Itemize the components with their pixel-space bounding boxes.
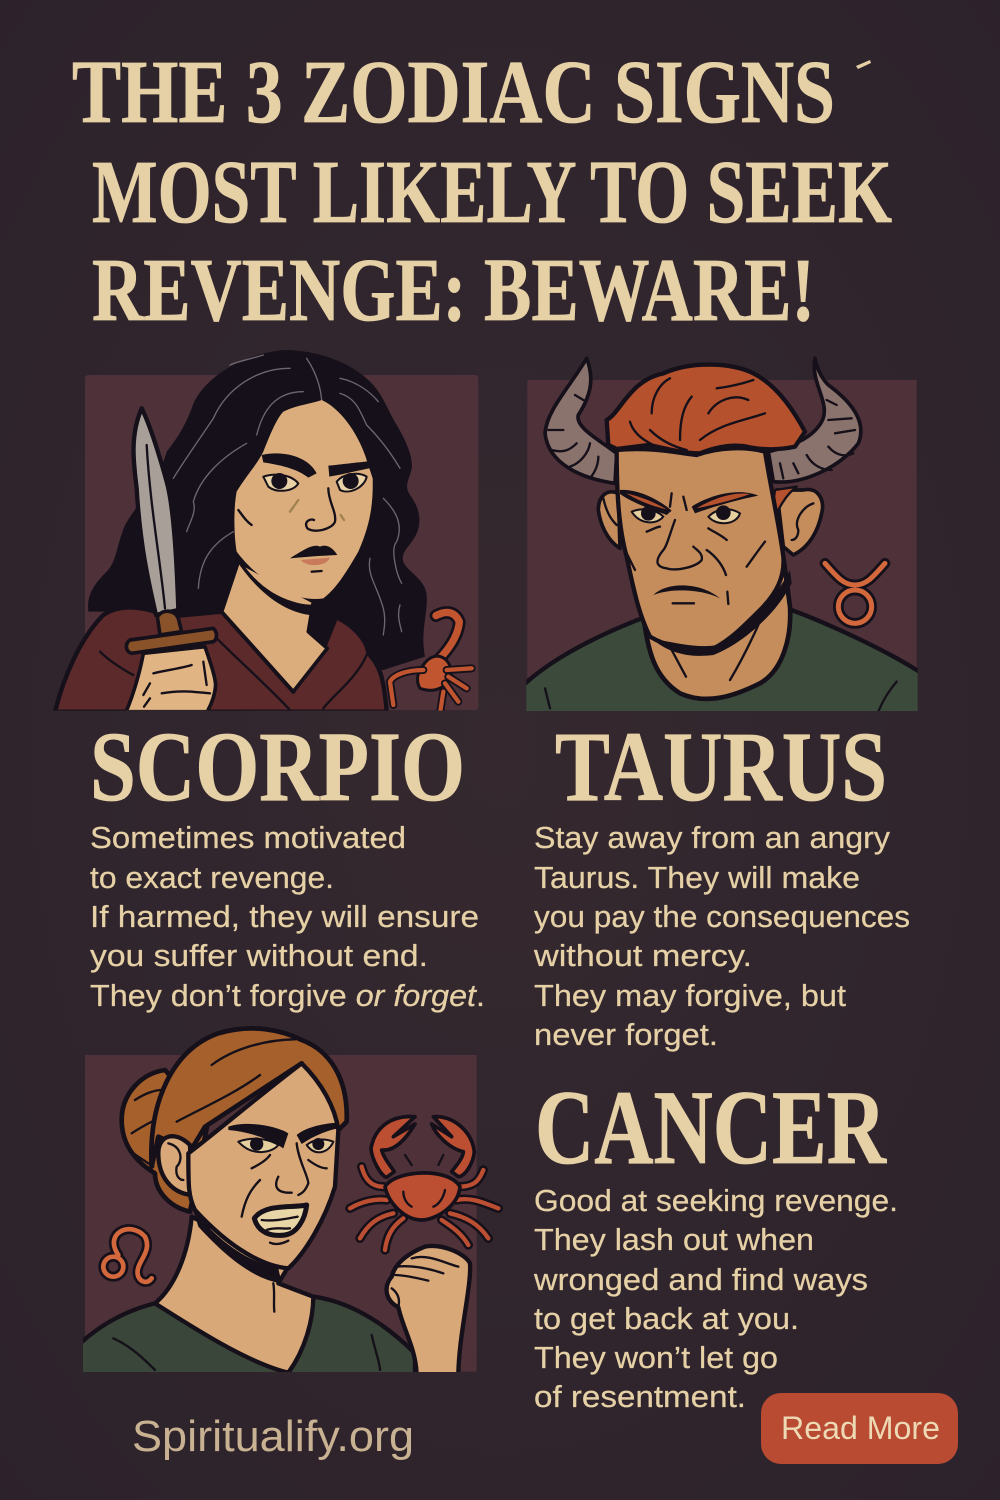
- eyes: [632, 505, 740, 523]
- fist: [387, 1246, 470, 1377]
- neck and chest: [222, 562, 327, 692]
- shirt: [78, 1297, 415, 1377]
- footer brand: Spiritualify.org: [132, 1412, 414, 1461]
- neck and chest: [155, 1217, 313, 1373]
- lips: [290, 546, 337, 558]
- text: cancer description: to get back at you.: [534, 1301, 799, 1336]
- button: read more: [761, 1393, 958, 1464]
- text: scorpio description: They don’t forgive or forget.: [90, 978, 485, 1013]
- text: taurus description: never forget.: [534, 1017, 718, 1052]
- panel: taurus illustration: [522, 358, 922, 717]
- hair highlights: [173, 355, 402, 635]
- panel: scorpio illustration: [55, 350, 478, 713]
- text: cancer description: They won’t let go: [534, 1340, 778, 1375]
- shirt: [522, 608, 922, 717]
- text: scorpio description: [90, 820, 485, 1013]
- title: REVENGE: BEWARE!: [92, 241, 815, 340]
- hair bun: [122, 1070, 208, 1212]
- chin shadow: [652, 570, 792, 656]
- text: taurus description: They may forgive, but: [534, 978, 846, 1013]
- cloak: [55, 607, 387, 712]
- heading: scorpio: SCORPIO: [90, 711, 465, 822]
- text: cancer description: Good at seeking revenge.: [534, 1183, 898, 1218]
- text: taurus description: you pay the consequences: [534, 899, 910, 934]
- text: scorpio description: If harmed, they will ensure: [90, 899, 479, 934]
- heading: taurus: TAURUS: [555, 711, 887, 822]
- dagger: [126, 408, 216, 653]
- horns: [545, 358, 861, 483]
- crab: [350, 1117, 498, 1250]
- text: cancer description: They lash out when: [534, 1222, 814, 1257]
- wrinkles: [242, 1155, 327, 1217]
- nose and wrinkles: [627, 493, 765, 604]
- mouth: [653, 585, 720, 598]
- neck: [643, 557, 790, 699]
- text: cancer description: [533, 1183, 898, 1414]
- hair: [151, 1028, 347, 1167]
- fist: [126, 647, 216, 712]
- scorpion: [390, 612, 472, 713]
- title: THE 3 ZODIAC SIGNS: [72, 43, 835, 142]
- eyes: [238, 1137, 333, 1152]
- text: scorpio description: to exact revenge.: [90, 860, 334, 895]
- ear: [158, 1136, 192, 1195]
- text: taurus description: Taurus. They will make: [534, 860, 860, 895]
- nose: [306, 488, 335, 531]
- text: cancer description: wronged and find ways: [533, 1262, 868, 1297]
- button: read more: Read More: [781, 1410, 940, 1446]
- hair: [88, 350, 427, 670]
- mouth: [254, 1205, 307, 1235]
- symbol: leo: [103, 1229, 152, 1282]
- left ear: [598, 492, 620, 548]
- hair: [607, 365, 805, 453]
- face: [234, 400, 373, 599]
- symbol: taurus: [825, 563, 885, 623]
- text: taurus description: [533, 820, 910, 1052]
- heading: cancer: CANCER: [535, 1069, 887, 1186]
- brows: [262, 453, 373, 478]
- chin shadow: [239, 564, 337, 646]
- chin shadow: [193, 1210, 282, 1283]
- brows: [228, 1123, 338, 1148]
- text: taurus description: Stay away from an angry: [534, 820, 891, 855]
- nose: [276, 1143, 308, 1195]
- eyes: [263, 473, 367, 491]
- right ear: [777, 489, 823, 555]
- text: scorpio description: you suffer without end.: [90, 938, 428, 973]
- text: cancer description: of resentment.: [534, 1379, 746, 1414]
- text: scorpio description: Sometimes motivated: [90, 820, 406, 855]
- face: [617, 448, 784, 652]
- face: [188, 1063, 338, 1268]
- brows: [620, 490, 758, 515]
- text: taurus description: without mercy.: [533, 938, 752, 973]
- title: [72, 43, 892, 340]
- panel: cancer illustration: [78, 1028, 498, 1377]
